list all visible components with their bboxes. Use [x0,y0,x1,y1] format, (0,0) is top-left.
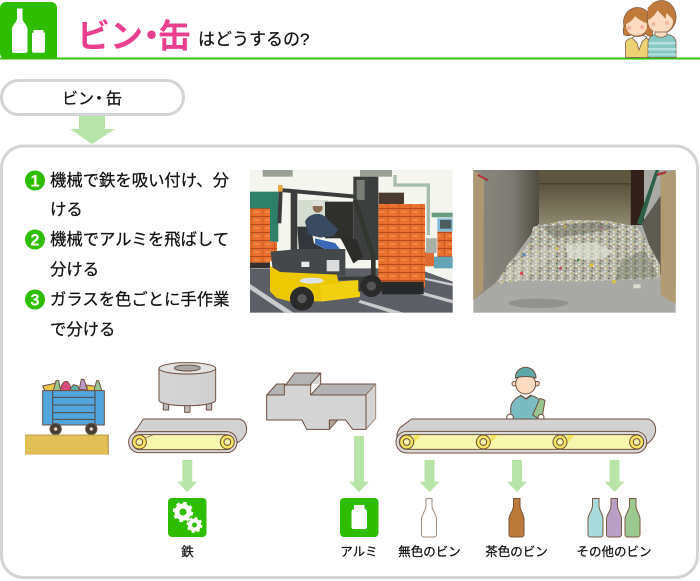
label: brown bottle: 茶色のビン [485,545,548,559]
steps list [25,170,229,339]
label: aluminium: アルミ [340,545,378,559]
arrow: start to panel [70,116,115,144]
step 1: 機械で鉄を吸い付け、分 [50,172,229,190]
title [77,18,309,54]
icon: iron gears [168,498,206,537]
illustration: magnet over conveyor [129,363,247,453]
header band [0,0,700,60]
panel: sorting process [2,146,698,578]
arrow: to clear bottle [420,460,440,492]
arrow: to aluminium [349,436,369,492]
start label: bins and cans [2,80,184,114]
arrow: to iron [177,460,197,492]
step 2: 機械でアルミを飛ばして [50,231,229,249]
icon: aluminium can [340,498,378,537]
step 1: ける [50,201,83,219]
label: other bottles: その他のビン [576,545,652,559]
start label: bins and cans: ビン・缶 [62,90,122,108]
conveyor [396,419,656,453]
arrow: to brown bottle [507,460,527,492]
icon: brown bottle [509,498,524,537]
loaded bottles [43,379,102,391]
icon: clear bottle [422,498,436,537]
step 3 [25,290,229,339]
arrow: to other bottles [604,460,624,492]
step 2: 分ける [50,261,99,279]
step 1: 1 [30,172,40,190]
label: clear bottle: 無色のビン [398,544,461,559]
icon: bottle and jar [0,2,57,59]
label: iron: 鉄 [181,544,194,559]
icon: other coloured bottles [588,498,640,537]
illustration: hand-sorting conveyor with worker [396,367,656,453]
title: ビン・缶 [77,18,191,54]
icon: couple [623,0,676,58]
step 2 [25,230,229,279]
photo: forklift with crates [250,170,453,313]
illustration: wagon on platform [25,379,109,455]
step 2: 2 [30,232,40,250]
step 1 [25,170,229,219]
photo: pile of crushed bottles and cans [473,170,676,313]
magnet [159,363,216,412]
worker [507,367,545,421]
conveyor [129,419,247,453]
step 3: 3 [30,292,40,310]
illustration: air blower machine [267,373,376,429]
title: はどうするの? [198,30,309,49]
step 3: ガラスを色ごとに手作業 [50,291,229,309]
step 3: で分ける [50,321,115,339]
